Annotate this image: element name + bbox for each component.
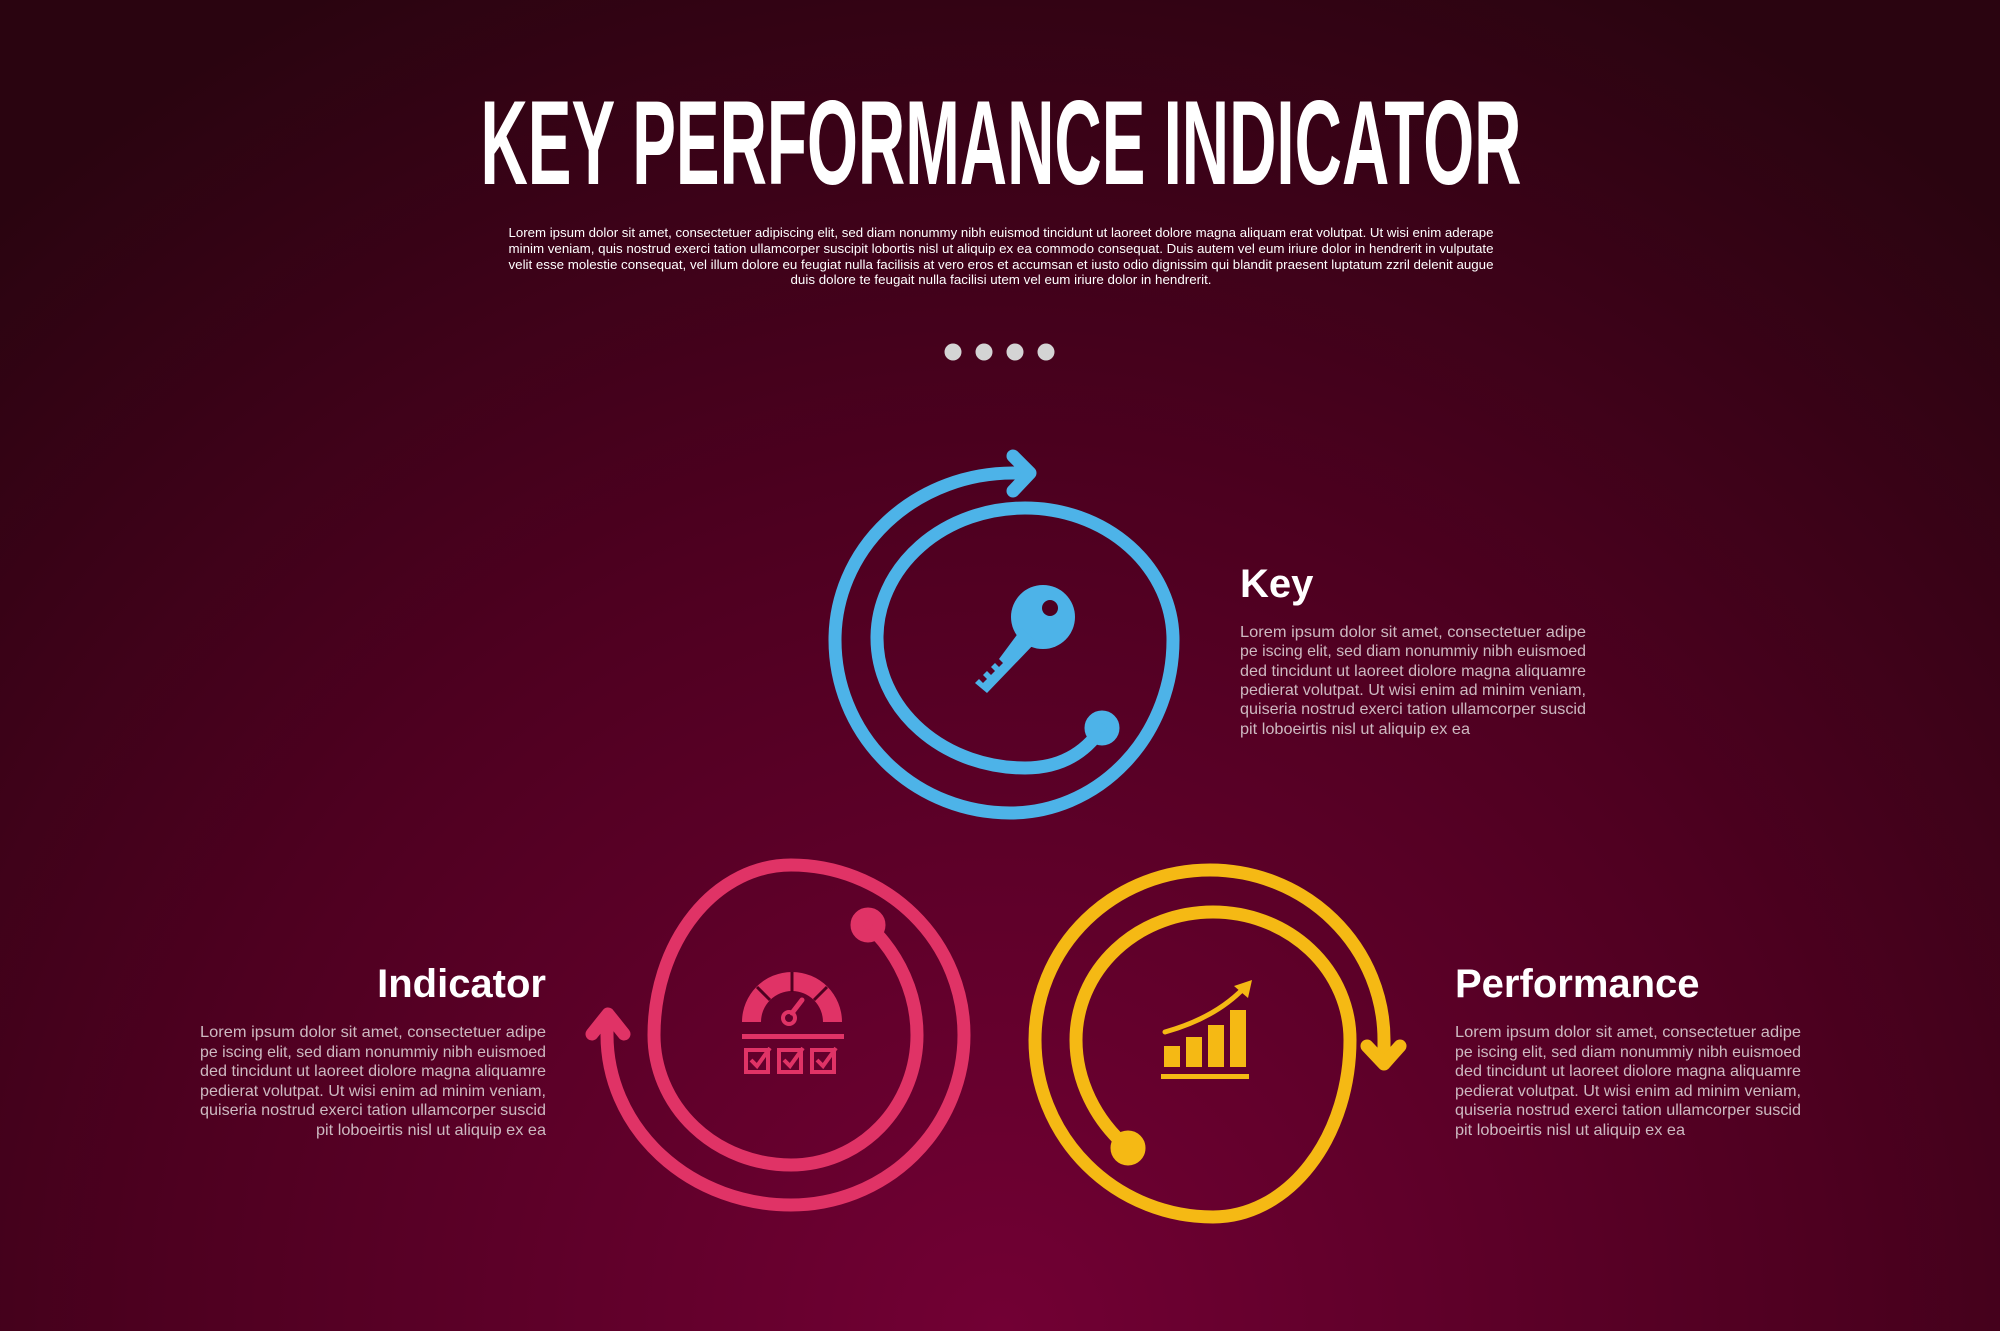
blue spiral: key [835, 456, 1173, 813]
dots [944, 344, 1054, 360]
text: performance [1455, 962, 1801, 1139]
text: key: quiseria nostrud exerci tation ullamcorper suscid [1240, 701, 1586, 718]
text: performance: Lorem ipsum dolor sit amet, consectetuer adipe [1455, 1024, 1801, 1041]
text: indicator: quiseria nostrud exerci tation ullamcorper suscid [200, 1102, 546, 1119]
text: indicator: pedierat volutpat. Ut wisi enim ad minim veniam, [200, 1083, 546, 1100]
intro paragraph: minim veniam, quis nostrud exerci tation ullamcorper suscipit lobortis nisl ut aliquip ex ea commodo consequat. Duis autem vel eum iriure dolor in hendrerit in vulputate [508, 241, 1494, 256]
yellow spiral: performance [1035, 870, 1400, 1217]
text: key [1240, 562, 1586, 738]
text: indicator [200, 962, 546, 1139]
text: key: pedierat volutpat. Ut wisi enim ad minim veniam, [1240, 682, 1586, 699]
icon: key [975, 585, 1075, 693]
text: key: ded tincidunt ut laoreet diolore magna aliquamre [1240, 663, 1586, 680]
text: key: pit loboeirtis nisl ut aliquip ex ea [1240, 721, 1470, 738]
text: indicator: pit loboeirtis nisl ut aliquip ex ea [316, 1122, 546, 1139]
text: performance: pit loboeirtis nisl ut aliquip ex ea [1455, 1122, 1685, 1139]
text: key: Lorem ipsum dolor sit amet, consectetuer adipe [1240, 624, 1586, 641]
text: indicator: Indicator [377, 962, 546, 1006]
text: indicator: ded tincidunt ut laoreet diolore magna aliquamre [200, 1063, 546, 1080]
text: performance: Performance [1455, 962, 1700, 1006]
text: performance: quiseria nostrud exerci tation ullamcorper suscid [1455, 1102, 1801, 1119]
text: indicator: pe iscing elit, sed diam nonummiy nibh euismoed [200, 1044, 546, 1061]
icon: gauge with checkboxes [742, 972, 844, 1072]
intro paragraph: duis dolore te feugait nulla facilisi utem vel eum iriure dolor in hendrerit. [790, 272, 1212, 287]
text: key: Key [1240, 562, 1314, 606]
text: key: pe iscing elit, sed diam nonummiy nibh euismoed [1240, 643, 1586, 660]
red spiral: indicator [592, 865, 964, 1205]
icon: growth chart [1161, 980, 1252, 1079]
text: indicator: Lorem ipsum dolor sit amet, consectetuer adipe [200, 1024, 546, 1041]
intro paragraph: velit esse molestie consequat, vel illum dolore eu feugiat nulla facilisis at vero eros et accumsan et iusto odio dignissim qui blandit praesent luptatum zzril delenit augue [508, 257, 1494, 272]
intro paragraph: Lorem ipsum dolor sit amet, consectetuer adipiscing elit, sed diam nonummy nibh euismod tincidunt ut laoreet dolore magna aliquam erat volutpat. Ut wisi enim aderape [508, 225, 1494, 240]
text: performance: pedierat volutpat. Ut wisi enim ad minim veniam, [1455, 1083, 1801, 1100]
text: performance: pe iscing elit, sed diam nonummiy nibh euismoed [1455, 1044, 1801, 1061]
text: performance: ded tincidunt ut laoreet diolore magna aliquamre [1455, 1063, 1801, 1080]
intro paragraph [508, 225, 1494, 287]
